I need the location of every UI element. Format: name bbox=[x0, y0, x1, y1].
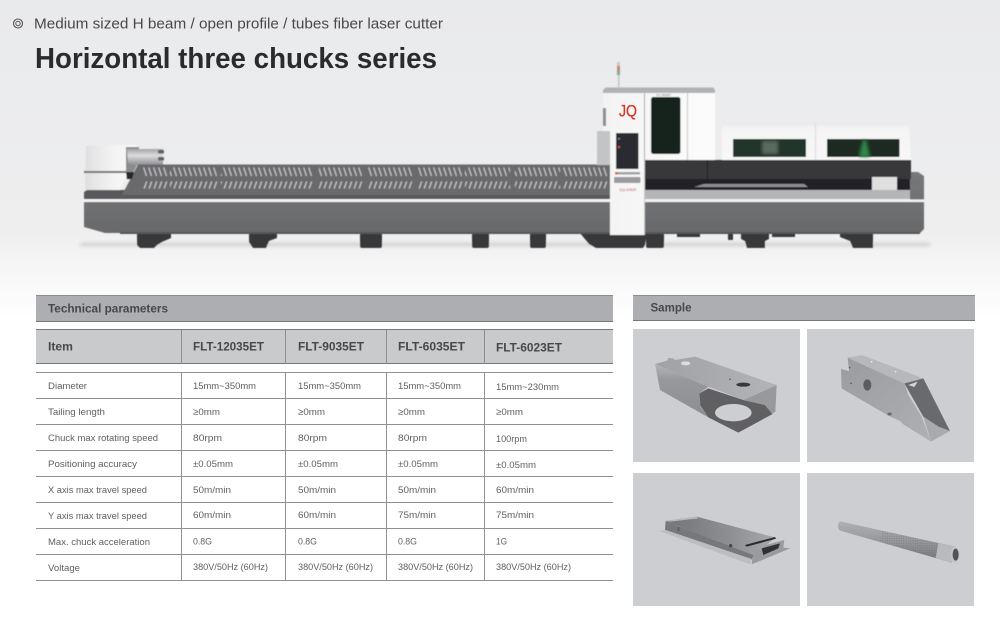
row: tailing length: ≥0mm bbox=[298, 407, 325, 418]
section header: technical parameters bbox=[36, 295, 613, 322]
rear chuck body bbox=[85, 145, 137, 190]
row: x axis max travel speed: 60m/min bbox=[496, 485, 534, 496]
control panel bbox=[612, 131, 643, 192]
row: max chuck acceleration bbox=[48, 536, 507, 548]
bed base bbox=[84, 172, 924, 233]
row: x axis max travel speed bbox=[48, 485, 534, 496]
row: x axis max travel speed: 50m/min bbox=[193, 485, 231, 496]
row: diameter: 15mm~350mm bbox=[398, 381, 461, 392]
row: chuck max rotating speed: 80rpm bbox=[193, 433, 222, 444]
model tag: FLT-9035T bbox=[656, 93, 671, 97]
section header: sample: Sample bbox=[650, 302, 692, 314]
floor shadow bbox=[80, 243, 930, 246]
support feet bbox=[137, 233, 873, 248]
row: y axis max travel speed: 60m/min bbox=[193, 510, 231, 521]
perforated bed panel bbox=[122, 164, 612, 195]
row: chuck max rotating speed: 100rpm bbox=[496, 434, 527, 445]
row: x axis max travel speed: 50m/min bbox=[398, 485, 436, 496]
row: y axis max travel speed: Y axis max travel speed bbox=[48, 511, 147, 522]
section header: sample bbox=[633, 295, 975, 321]
row: y axis max travel speed: 75m/min bbox=[496, 510, 534, 521]
row: voltage: 380V/50Hz (60Hz) bbox=[298, 562, 373, 573]
table header row: FLT-9035ET bbox=[298, 342, 364, 354]
row: tailing length: ≥0mm bbox=[496, 407, 523, 418]
row: diameter: 15mm~350mm bbox=[298, 381, 361, 392]
cutting head cabin bbox=[603, 92, 715, 235]
machine illustration bbox=[80, 62, 930, 248]
row: y axis max travel speed: 60m/min bbox=[298, 510, 336, 521]
row: positioning accuracy: ±0.05mm bbox=[398, 459, 438, 470]
sample panel: angled open box bbox=[807, 329, 974, 462]
top rail bbox=[84, 190, 644, 199]
row: y axis max travel speed: 75m/min bbox=[398, 510, 436, 521]
sample panel: perforated round tube bbox=[807, 473, 974, 606]
title: Horizontal three chucks series bbox=[35, 43, 437, 75]
row: x axis max travel speed: 50m/min bbox=[298, 485, 336, 496]
table header row: FLT-6035ET bbox=[398, 342, 465, 354]
row: max chuck acceleration: 0.8G bbox=[298, 536, 317, 548]
row: chuck max rotating speed: 80rpm bbox=[298, 433, 327, 444]
table header row: FLT-12035ET bbox=[193, 342, 264, 354]
brand logo: JQ bbox=[619, 102, 637, 120]
icon: bullet ring bbox=[14, 19, 22, 28]
row: tailing length: ≥0mm bbox=[398, 407, 425, 418]
row: positioning accuracy: ±0.05mm bbox=[496, 460, 536, 471]
signal light tower bbox=[617, 62, 620, 88]
row: diameter: 15mm~230mm bbox=[496, 382, 559, 393]
row: tailing length: ≥0mm bbox=[193, 407, 220, 418]
row: voltage: 380V/50Hz (60Hz) bbox=[496, 562, 571, 573]
row: voltage bbox=[48, 562, 571, 574]
table header row: Item bbox=[48, 342, 73, 354]
gantry back bbox=[597, 131, 612, 165]
cabin window bbox=[651, 97, 680, 154]
table header row bbox=[36, 329, 613, 364]
row: voltage: Voltage bbox=[48, 563, 80, 574]
parameters table bbox=[36, 329, 613, 581]
row: max chuck acceleration: 1G bbox=[496, 536, 507, 548]
section header: technical parameters: Technical parameters bbox=[48, 304, 168, 316]
enclosure windows bbox=[733, 139, 900, 157]
row: voltage: 380V/50Hz (60Hz) bbox=[398, 562, 473, 573]
row: max chuck acceleration: 0.8G bbox=[398, 536, 417, 548]
row: tailing length bbox=[48, 407, 523, 418]
sample panel: flat channel section bbox=[633, 473, 800, 606]
row: chuck max rotating speed bbox=[48, 433, 527, 445]
row: positioning accuracy: ±0.05mm bbox=[298, 459, 338, 470]
row: x axis max travel speed: X axis max travel speed bbox=[48, 485, 147, 496]
row: chuck max rotating speed: Chuck max rotating speed bbox=[48, 433, 158, 444]
row: positioning accuracy: ±0.05mm bbox=[193, 459, 233, 470]
sample panel: bent channel with round cut-out bbox=[633, 329, 800, 462]
row: voltage: 380V/50Hz (60Hz) bbox=[193, 562, 268, 573]
control panel: JQLASER bbox=[619, 188, 637, 192]
row: tailing length: Tailing length bbox=[48, 407, 105, 418]
rear enclosure bbox=[722, 123, 911, 160]
interior dark band bbox=[644, 160, 911, 179]
row: y axis max travel speed bbox=[48, 510, 534, 522]
row: diameter: 15mm~350mm bbox=[193, 381, 256, 392]
row: positioning accuracy: Positioning accuracy bbox=[48, 459, 137, 470]
row: diameter: Diameter bbox=[48, 381, 87, 392]
subtitle: Medium sized H beam / open profile / tubes fiber laser cutter bbox=[34, 16, 443, 32]
row: chuck max rotating speed: 80rpm bbox=[398, 433, 427, 444]
table header row: FLT-6023ET bbox=[496, 342, 562, 354]
row: diameter bbox=[48, 381, 559, 393]
row: positioning accuracy bbox=[48, 459, 536, 471]
row: max chuck acceleration: 0.8G bbox=[193, 536, 212, 548]
row: max chuck acceleration: Max. chuck acceleration bbox=[48, 537, 150, 548]
